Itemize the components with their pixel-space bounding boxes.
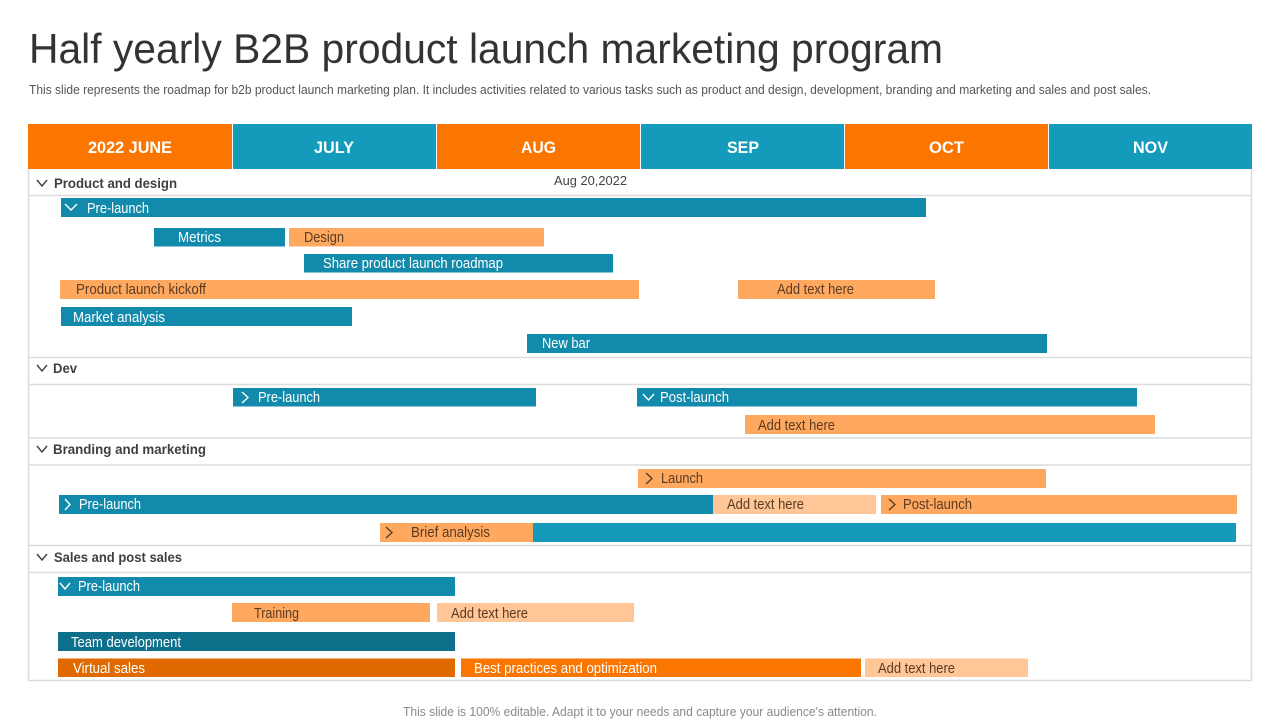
month: Aug: AUG (521, 138, 556, 157)
bar: add text here: Add text here (878, 661, 955, 677)
month: 2022 June: 2022 JUNE (88, 138, 172, 157)
bar: team development (58, 632, 455, 651)
month: July (233, 124, 436, 169)
bar: pre-launch: Pre-launch (258, 390, 320, 406)
bar: launch: Launch (661, 471, 703, 487)
bar: virtual sales (58, 658, 455, 677)
bar: design: Design (304, 230, 344, 246)
month: 2022 June (28, 124, 232, 169)
bar: best practices and optimization: Best practices and optimization (474, 661, 657, 677)
bar: launch (638, 469, 1046, 488)
bar: add text here (738, 280, 935, 299)
bar: brief analysis: Brief analysis (411, 525, 490, 541)
bar: pre-launch (59, 495, 713, 514)
bar: add text here: Add text here (727, 497, 804, 513)
bar: post-launch (881, 495, 1237, 514)
panel: dev (37, 360, 1155, 434)
bar: add text here (437, 603, 634, 622)
bar: pre-launch: Pre-launch (79, 497, 141, 513)
heading: dev: Dev (53, 360, 77, 376)
panel: product and design (37, 173, 1047, 353)
bar: add text here: Add text here (777, 282, 854, 298)
bar: pre-launch (233, 388, 536, 406)
month: Sep: SEP (727, 138, 759, 157)
bar: share product launch roadmap: Share product launch roadmap (323, 256, 503, 272)
heading: branding and marketing: Branding and marketing (53, 441, 206, 457)
bar: add text here (865, 658, 1028, 677)
heading: dev (37, 360, 77, 376)
bar: post-launch: Post-launch (660, 390, 729, 406)
bar: add text here: Add text here (758, 418, 835, 434)
bar: design (289, 228, 544, 246)
bar: post-launch: Post-launch (903, 497, 972, 513)
month: Sep (641, 124, 844, 169)
bar: add text here: Add text here (451, 606, 528, 622)
bar: new bar: New bar (542, 336, 590, 352)
bar: pre-launch (61, 198, 926, 217)
bar: product launch kickoff (60, 280, 639, 299)
bar: pre-launch: Pre-launch (78, 579, 140, 595)
bar: add text here (745, 415, 1155, 434)
heading: product and design: Product and design (54, 175, 177, 191)
bar: market analysis (61, 307, 352, 326)
bar: training: Training (254, 606, 299, 622)
bar: share product launch roadmap (304, 254, 613, 272)
panel: branding and marketing (37, 441, 1237, 542)
month header (28, 124, 1252, 169)
bar: virtual sales: Virtual sales (73, 661, 145, 677)
month: Oct (845, 124, 1048, 169)
bar: brief analysis (380, 523, 533, 542)
subtitle: This slide represents the roadmap for b2b product launch marketing plan. It includes activities related to various tasks such as product and design, development, branding and marketing and sales and post sales. (29, 83, 1151, 97)
month: Nov (1049, 124, 1252, 169)
bar: market analysis: Market analysis (73, 310, 165, 326)
bar: unlabelled teal (533, 523, 1236, 542)
bar: best practices and optimization (461, 658, 861, 677)
bar: metrics (154, 228, 285, 246)
bar: pre-launch: Pre-launch (87, 201, 149, 217)
bar: add text here (713, 495, 876, 514)
month: Nov: NOV (1133, 138, 1169, 157)
bar: training (232, 603, 430, 622)
heading: sales and post sales: Sales and post sales (54, 549, 182, 565)
title: Half yearly B2B product launch marketing program (29, 25, 943, 72)
bar: product launch kickoff: Product launch kickoff (76, 282, 207, 298)
month: Aug (437, 124, 640, 169)
footer note: This slide is 100% editable. Adapt it to your needs and capture your audience's attention. (403, 705, 877, 719)
month: July: JULY (314, 138, 355, 157)
bar: new bar (527, 334, 1047, 353)
panel: sales and post sales (37, 549, 1028, 677)
month: Oct: OCT (929, 138, 965, 157)
date label: Aug 20,2022 (554, 173, 627, 188)
bar: post-launch (637, 388, 1137, 406)
bar: pre-launch (58, 577, 455, 596)
bar: team development: Team development (71, 635, 181, 651)
bar: metrics: Metrics (178, 230, 221, 246)
